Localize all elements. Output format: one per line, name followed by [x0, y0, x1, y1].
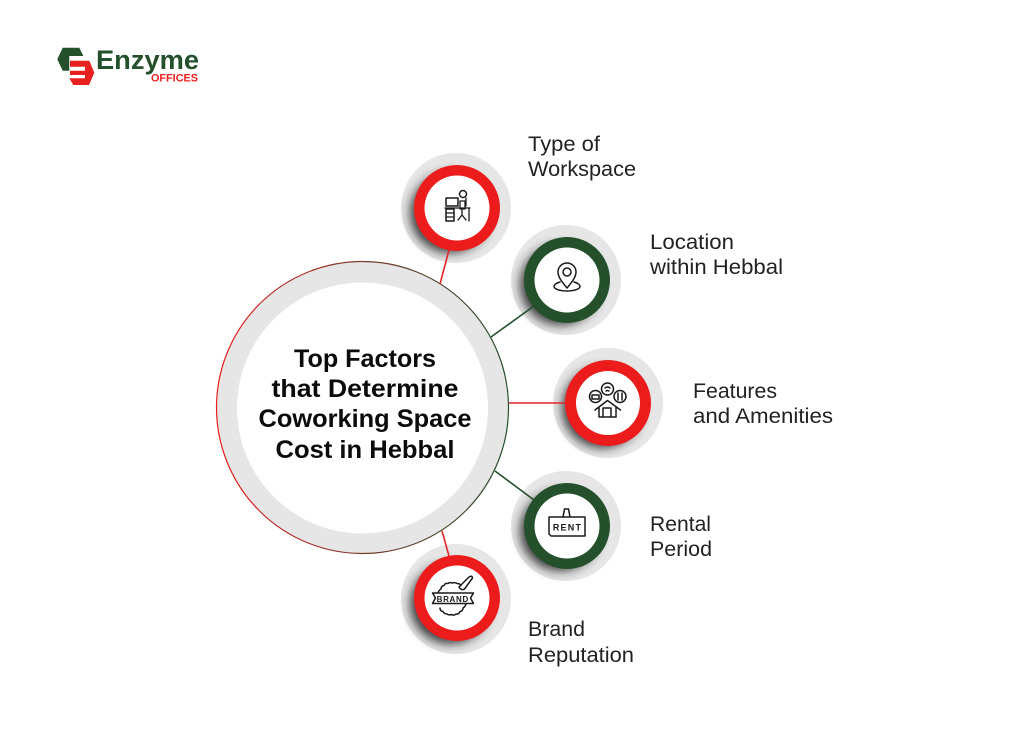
label: Location within Hebbal: [649, 231, 783, 279]
icon: rent sign: RENT: [553, 522, 582, 532]
logo wordmark: Enzyme: [96, 45, 199, 75]
node: Type of Workspace: [401, 153, 511, 284]
node: Location within Hebbal: [491, 225, 621, 337]
central circle: [216, 262, 508, 554]
icon: desk and chair: [445, 190, 470, 221]
label: Brand Reputation: Brand: [528, 618, 585, 641]
logo icon: hexagon E: [57, 48, 94, 85]
label: Features and Amenities: [693, 380, 833, 428]
label: Brand Reputation: [528, 618, 634, 667]
label: Features and Amenities: and Amenities: [693, 405, 833, 428]
heading: Cost in Hebbal: [276, 436, 454, 464]
heading: [258, 345, 472, 464]
heading: that Determine: [272, 375, 459, 403]
icon: house with amenities: [590, 383, 626, 417]
label: Rental Period: Rental: [650, 513, 711, 536]
logo: Enzyme Offices: [57, 45, 199, 85]
label: Location within Hebbal: within Hebbal: [649, 256, 783, 279]
label: Features and Amenities: Features: [693, 380, 777, 403]
label: Type of Workspace: Workspace: [528, 158, 636, 181]
label: Location within Hebbal: Location: [650, 231, 734, 254]
label: Type of Workspace: Type of: [528, 133, 600, 156]
node: Rental Period: [495, 471, 621, 581]
label: Brand Reputation: Reputation: [528, 644, 634, 667]
heading: Coworking Space: [258, 405, 472, 433]
heading: Top Factors: [294, 345, 436, 373]
label: Rental Period: [650, 513, 712, 561]
node: Brand Reputation: [401, 531, 511, 654]
logo subtitle: OFFICES: [151, 72, 198, 84]
node: Features and Amenities: [509, 348, 663, 458]
icon: map pin: [554, 263, 580, 291]
icon: brand badge: BRAND: [437, 595, 469, 604]
label: Rental Period: Period: [650, 538, 712, 561]
label: Type of Workspace: [528, 133, 636, 181]
